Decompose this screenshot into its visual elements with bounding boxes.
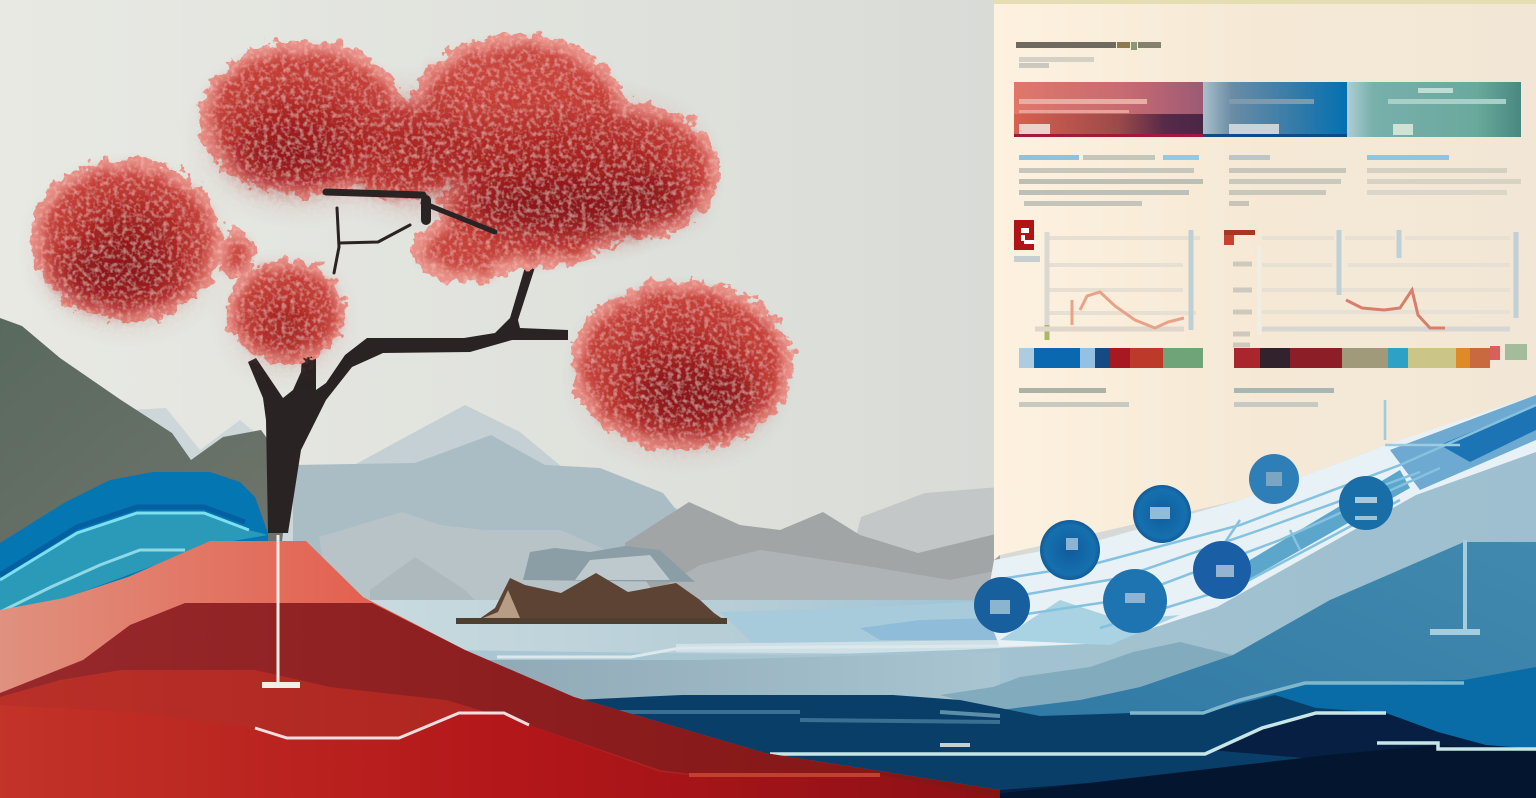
top strip	[994, 0, 1536, 4]
icon: red badge left	[1014, 220, 1034, 250]
distant mountains	[130, 405, 1000, 620]
water lines band	[985, 395, 1536, 647]
mid blue wave	[960, 542, 1536, 798]
canopy edge layer	[31, 34, 794, 450]
teal grey wave	[940, 642, 1233, 712]
bubble 1	[1040, 520, 1100, 580]
light blue wave hill	[370, 440, 1536, 798]
line chart right	[1233, 230, 1516, 345]
heading	[1016, 42, 1161, 68]
support post right	[1430, 540, 1480, 632]
bubble 3	[1249, 454, 1299, 504]
blue hill left	[0, 472, 268, 615]
bar strip left	[1019, 348, 1203, 368]
upper branches	[326, 192, 495, 273]
white wave lines	[770, 683, 1536, 754]
dark navy wave	[1000, 713, 1536, 798]
bubble 6	[1103, 569, 1167, 633]
white post and base	[262, 535, 300, 686]
deep blue wave	[1133, 667, 1536, 798]
bubble 5	[974, 577, 1030, 633]
bubble 7	[1193, 541, 1251, 599]
lake water	[360, 600, 1000, 700]
header band: teal	[1347, 82, 1521, 137]
header band: blue	[1203, 82, 1347, 137]
canopy dark core	[62, 131, 755, 425]
line chart left	[1014, 230, 1200, 340]
panel: data sheet	[994, 0, 1536, 560]
ground curve line	[255, 713, 529, 738]
bar strip right	[1234, 344, 1527, 368]
navy wave	[574, 695, 1536, 798]
icon: red badge right	[1224, 230, 1255, 245]
chart caption right	[1234, 388, 1334, 407]
canopy mid layer	[43, 46, 782, 438]
navy highlights	[615, 712, 1000, 722]
pale wave line	[497, 646, 1000, 657]
red hill	[0, 541, 1000, 798]
bubble 2	[1133, 485, 1191, 543]
tree canopy	[31, 34, 794, 450]
text block: column 1	[1019, 155, 1203, 206]
header band: red	[1014, 82, 1203, 137]
bubble 4	[1339, 476, 1393, 530]
water ripples	[676, 600, 1000, 655]
canopy wide shade	[65, 90, 752, 427]
text block: column 3	[1367, 155, 1521, 195]
tree trunk and branches	[248, 257, 568, 533]
island	[456, 546, 727, 624]
left green mountain	[0, 318, 290, 560]
chart caption left	[1019, 388, 1129, 407]
bottom dark shape	[960, 745, 1536, 798]
data bubbles	[974, 454, 1393, 633]
text block: column 2	[1229, 155, 1346, 206]
lower lake band	[480, 652, 1000, 700]
